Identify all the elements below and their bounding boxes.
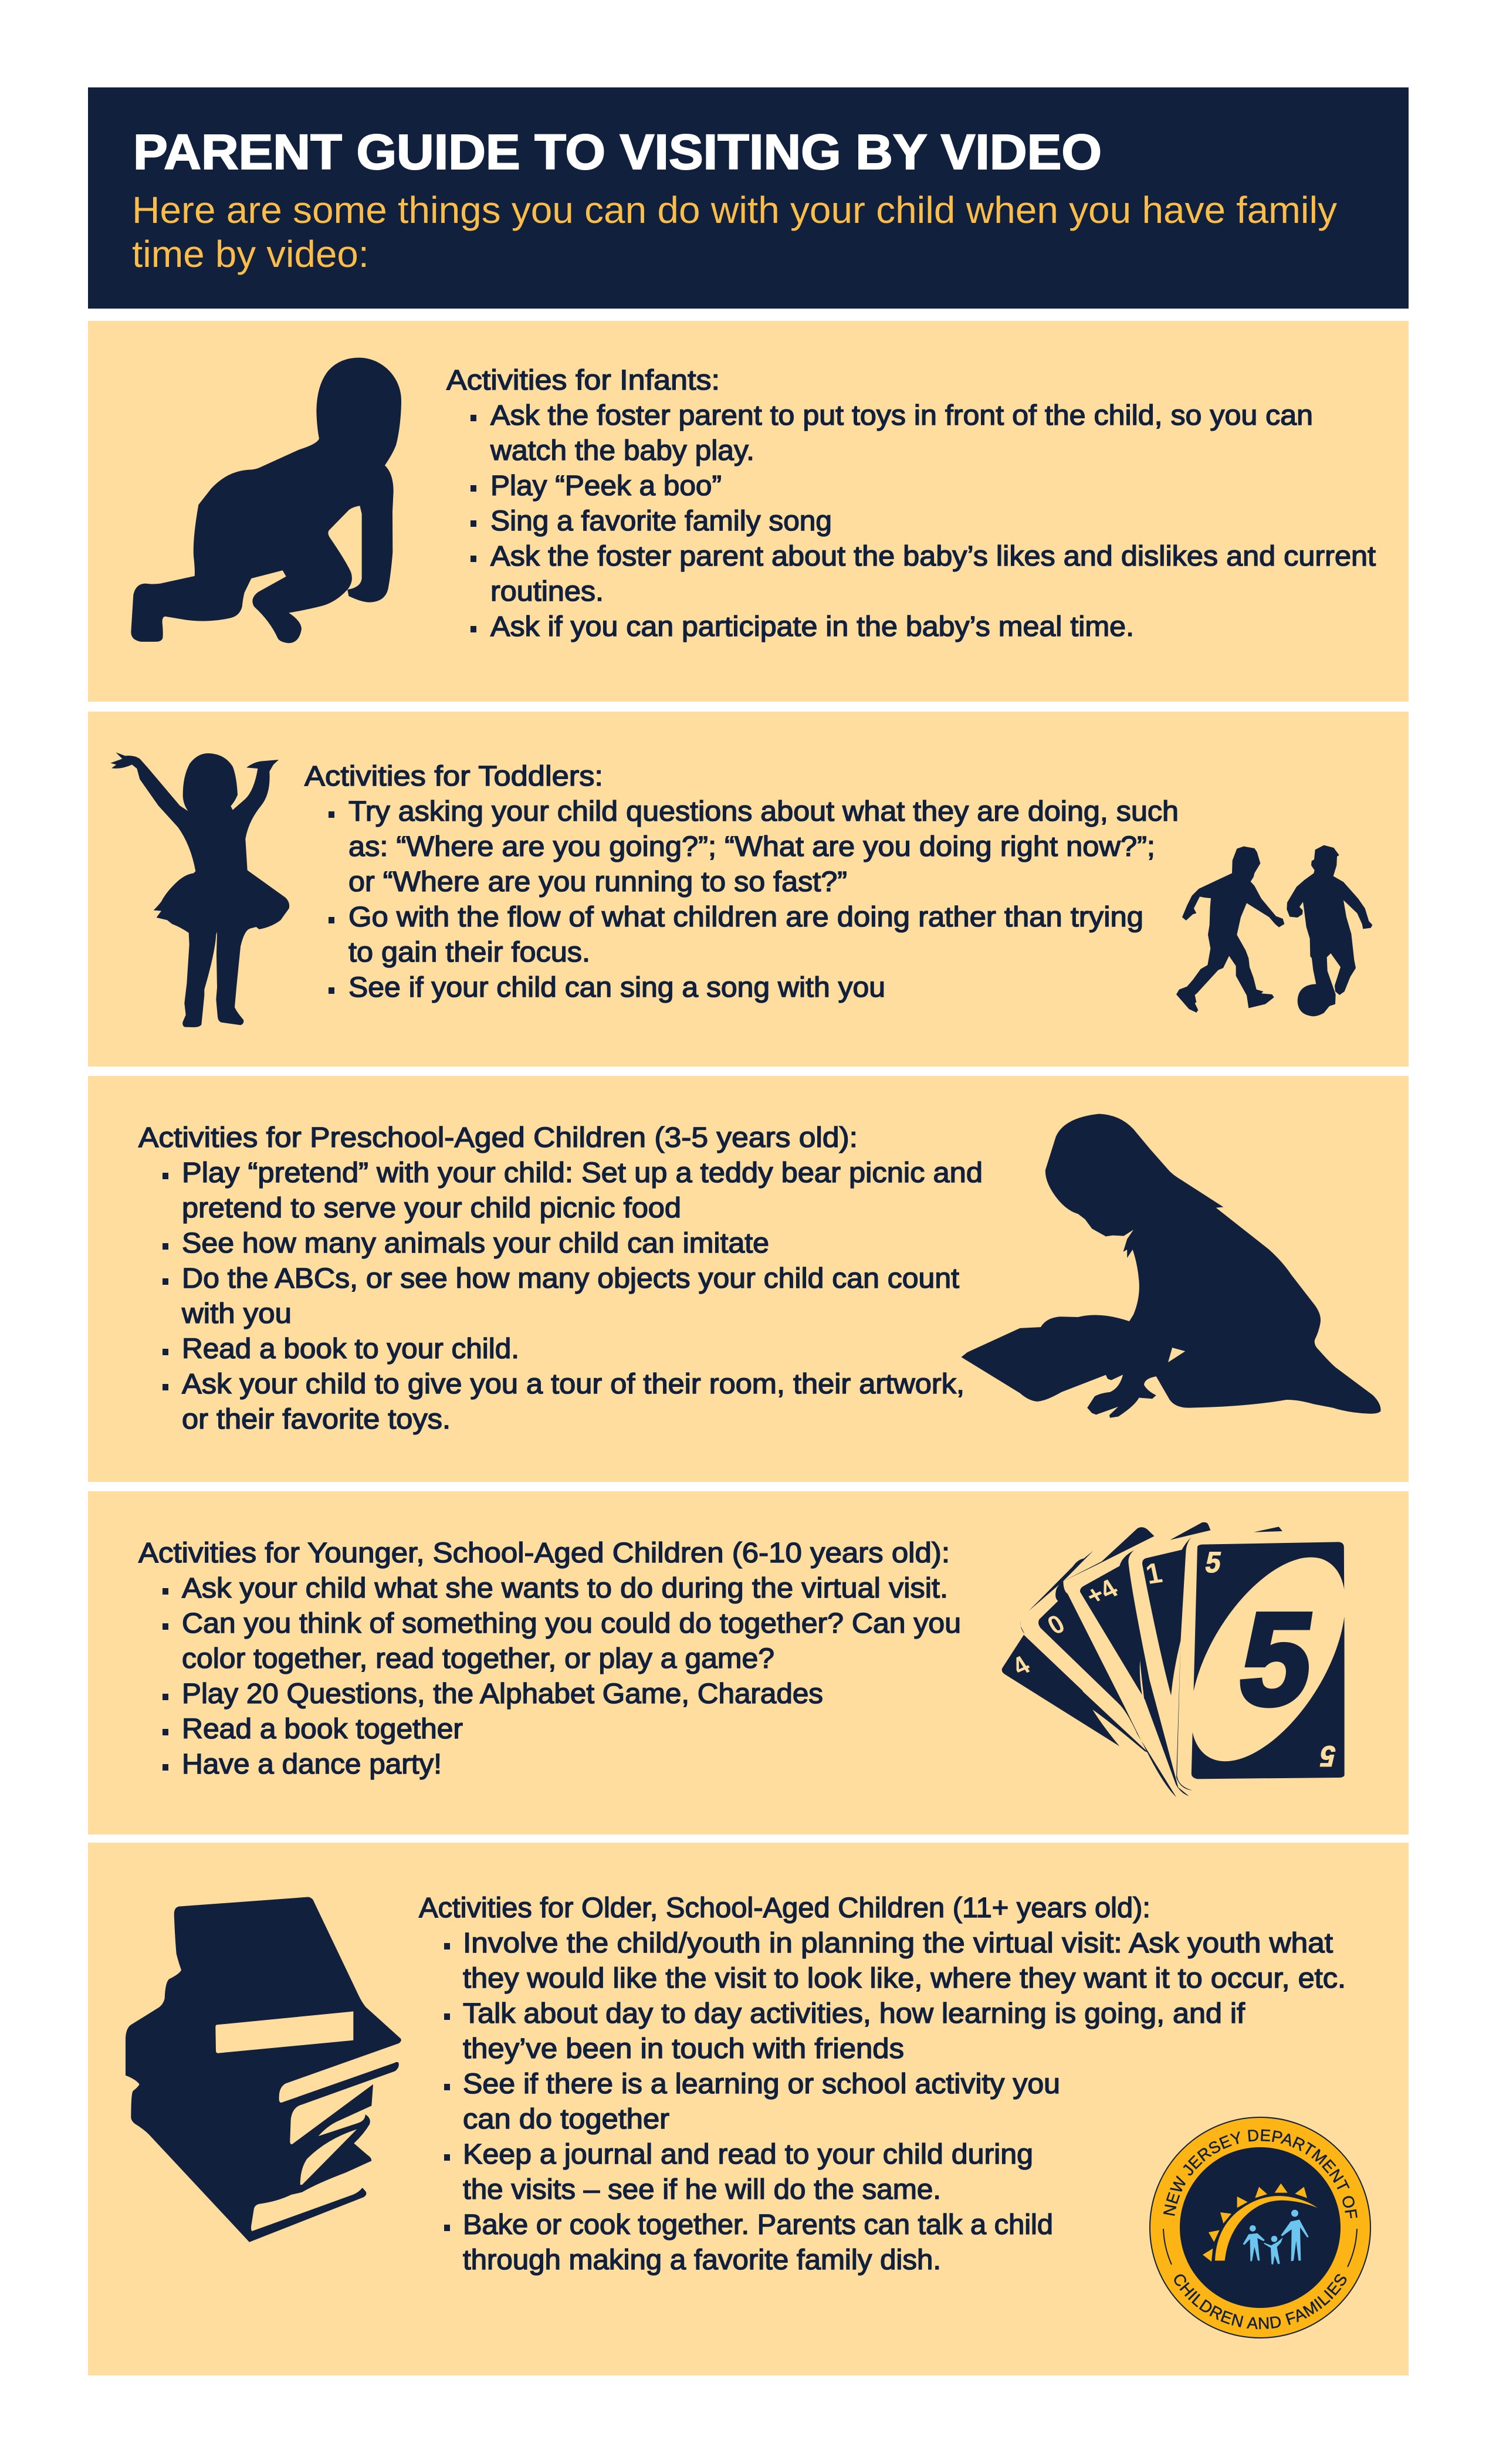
list: older school-aged activities: Involve the child/youth in planning the virtual visit: Ask youth what: [463, 1928, 1333, 1959]
list: preschool activities: See how many animals your child can imitate: [182, 1228, 769, 1259]
heading: infants: Activities for Infants:: [446, 365, 720, 396]
icon: dancing toddler: [110, 752, 289, 1027]
list: younger school-aged activities: color together, read together, or play a game?: [182, 1643, 774, 1674]
list: preschool activities: with you: [181, 1298, 292, 1329]
card numerals: +4: [1081, 1574, 1123, 1610]
heading: preschool: Activities for Preschool-Aged Children (3-5 years old):: [138, 1122, 858, 1153]
list: older school-aged activities: See if there is a learning or school activity you: [463, 2069, 1060, 2100]
panel: infants: [88, 321, 1409, 702]
list: older school-aged activities: they’ve been in touch with friends: [463, 2033, 904, 2064]
icon: child reading a book: [961, 1114, 1381, 1418]
icon: crawling baby: [131, 358, 401, 643]
list: toddler activities: See if your child can sing a song with you: [348, 972, 885, 1003]
subtitle: [132, 189, 1337, 275]
heading: older school-aged: Activities for Older, School-Aged Children (11+ years old):: [419, 1893, 1150, 1924]
list: infant activities: Sing a favorite family song: [490, 506, 832, 537]
panel: younger school-aged: [88, 1491, 1409, 1835]
list: older school-aged activities: they would like the visit to look like, where they want it to occur, etc.: [463, 1963, 1346, 1994]
list: older school-aged activities: Bake or cook together. Parents can talk a child: [463, 2209, 1053, 2240]
list: younger school-aged activities: Play 20 Questions, the Alphabet Game, Charades: [182, 1678, 823, 1710]
list: preschool activities: pretend to serve your child picnic food: [182, 1193, 681, 1224]
list: older school-aged activities: the visits – see if he will do the same.: [463, 2174, 941, 2205]
list: older school-aged activities: Talk about day to day activities, how learning is going, and if: [463, 1998, 1245, 2029]
list: preschool activities: [163, 1157, 983, 1435]
list: younger school-aged activities: Ask your child what she wants to do during the virtual visit.: [182, 1573, 948, 1604]
panel: older school-aged: [88, 1843, 1409, 2375]
panel: toddlers: [88, 712, 1409, 1067]
list: toddler activities: [329, 796, 1179, 1003]
card numerals: [1007, 1546, 1338, 1772]
icon: fan of playing cards: [1002, 1522, 1377, 1797]
list: older school-aged activities: can do together: [463, 2104, 669, 2135]
list: younger school-aged activities: Have a dance party!: [182, 1749, 442, 1780]
title: PARENT GUIDE TO VISITING BY VIDEO: [133, 124, 1102, 180]
heading: younger school-aged: Activities for Younger, School-Aged Children (6-10 years old):: [138, 1538, 950, 1569]
list: infant activities: routines.: [490, 576, 604, 607]
list: infant activities: Ask if you can participate in the baby’s meal time.: [490, 611, 1134, 642]
list: preschool activities: Do the ABCs, or see how many objects your child can count: [182, 1263, 959, 1294]
panel: preschool: [88, 1076, 1409, 1482]
header banner: [88, 87, 1409, 309]
list: infant activities: Play “Peek a boo”: [490, 471, 722, 502]
logo: New Jersey Department of Children and Families: [1149, 2117, 1371, 2338]
card numerals: 5: [1231, 1586, 1323, 1732]
list: preschool activities: or their favorite toys.: [182, 1404, 451, 1435]
list: younger school-aged activities: Can you think of something you could do together? Can you: [182, 1608, 961, 1639]
list: preschool activities: Read a book to your child.: [182, 1333, 519, 1365]
list: preschool activities: Play “pretend” with your child: Set up a teddy bear picnic and: [182, 1157, 983, 1189]
list: infant activities: [471, 400, 1376, 642]
list: older school-aged activities: Keep a journal and read to your child during: [463, 2139, 1033, 2170]
list: toddler activities: Try asking your child questions about what they are doing, such: [348, 796, 1179, 827]
list: older school-aged activities: through making a favorite family dish.: [463, 2245, 941, 2276]
logo: New Jersey Department of Children and Families: NEW JERSEY DEPARTMENT OF: [1163, 2130, 1358, 2219]
list: younger school-aged activities: Read a book together: [182, 1714, 463, 1745]
list: toddler activities: Go with the flow of what children are doing rather than trying: [348, 902, 1143, 933]
card numerals: 1: [1143, 1558, 1165, 1590]
heading: toddlers: Activities for Toddlers:: [304, 761, 603, 792]
icon: boys playing soccer: [1176, 845, 1372, 1016]
list: younger school-aged activities: [163, 1573, 961, 1780]
list: infant activities: Ask the foster parent about the baby’s likes and dislikes and current: [490, 541, 1376, 572]
icon: stack of books: [126, 1897, 401, 2242]
list: toddler activities: as: “Where are you going?”; “What are you doing right now?”;: [348, 831, 1155, 862]
list: toddler activities: to gain their focus.: [348, 937, 590, 968]
card numerals: 4: [1007, 1651, 1035, 1681]
list: infant activities: Ask the foster parent to put toys in front of the child, so you can: [490, 400, 1313, 431]
card numerals: 0: [1043, 1610, 1070, 1640]
card numerals: 5: [1203, 1546, 1224, 1579]
list: preschool activities: Ask your child to give you a tour of their room, their artwork,: [182, 1369, 964, 1400]
logo: New Jersey Department of Children and Families: CHILDREN AND FAMILIES: [1174, 2274, 1347, 2329]
card numerals: 5: [1317, 1739, 1338, 1772]
list: toddler activities: or “Where are you running to so fast?”: [348, 867, 847, 898]
subtitle: time by video:: [132, 233, 369, 275]
list: older school-aged activities: [444, 1928, 1346, 2276]
logo emblem: sun and family: [1203, 2184, 1318, 2265]
subtitle: Here are some things you can do with your child when you have family: [132, 189, 1337, 231]
list: infant activities: watch the baby play.: [490, 435, 754, 466]
